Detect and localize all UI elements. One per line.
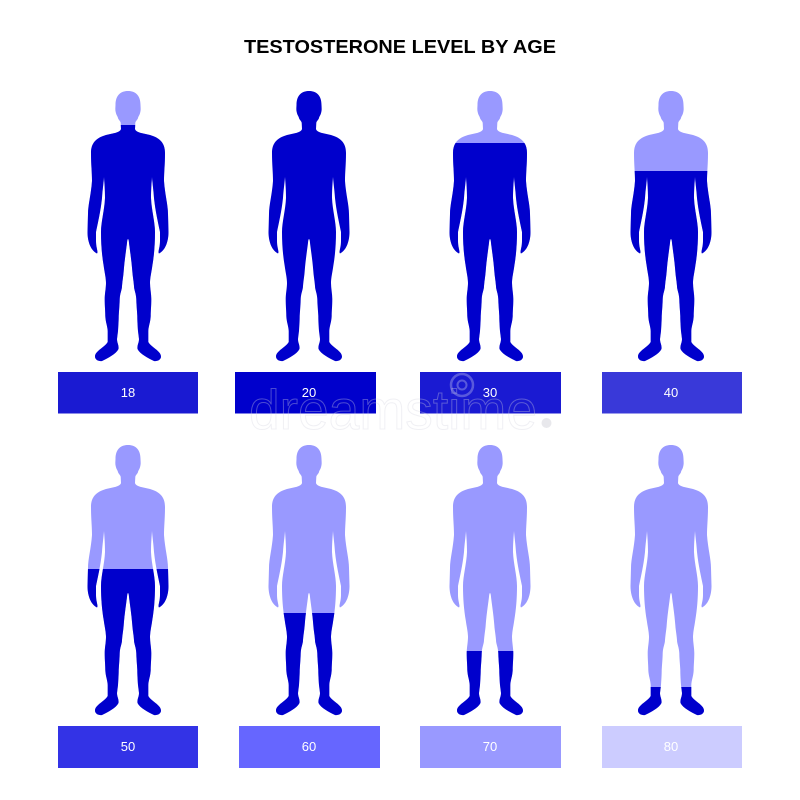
age bar: 70	[420, 726, 561, 768]
body figure: age 40	[630, 91, 712, 361]
age bar: 50	[58, 726, 198, 768]
age bar: 40	[602, 372, 742, 414]
body figure: age 70	[450, 445, 530, 715]
age bar: 60: 60	[302, 739, 316, 754]
watermark: dreamstime	[249, 378, 537, 441]
age bar: 80	[602, 726, 742, 768]
age bar: 80: 80	[664, 739, 678, 754]
age bar: 20: 20	[302, 385, 316, 400]
body figure: age 18	[88, 91, 168, 361]
age bar: 70: 70	[483, 739, 497, 754]
body figure: age 20	[268, 91, 350, 361]
body figure: age 30	[450, 91, 530, 361]
age bar: 30: 30	[483, 385, 497, 400]
age bar: 20	[235, 372, 376, 414]
body figure: age 60	[268, 445, 350, 715]
age bar: 30	[420, 372, 561, 414]
age bar: 60	[239, 726, 380, 768]
age bar: 18: 18	[121, 385, 135, 400]
age bar: 18	[58, 372, 198, 414]
body figure: age 80	[630, 445, 712, 715]
age bar: 40: 40	[664, 385, 678, 400]
body figure: age 50	[88, 445, 168, 715]
age bar: 50: 50	[121, 739, 135, 754]
title: TESTOSTERONE LEVEL BY AGE	[244, 37, 556, 57]
